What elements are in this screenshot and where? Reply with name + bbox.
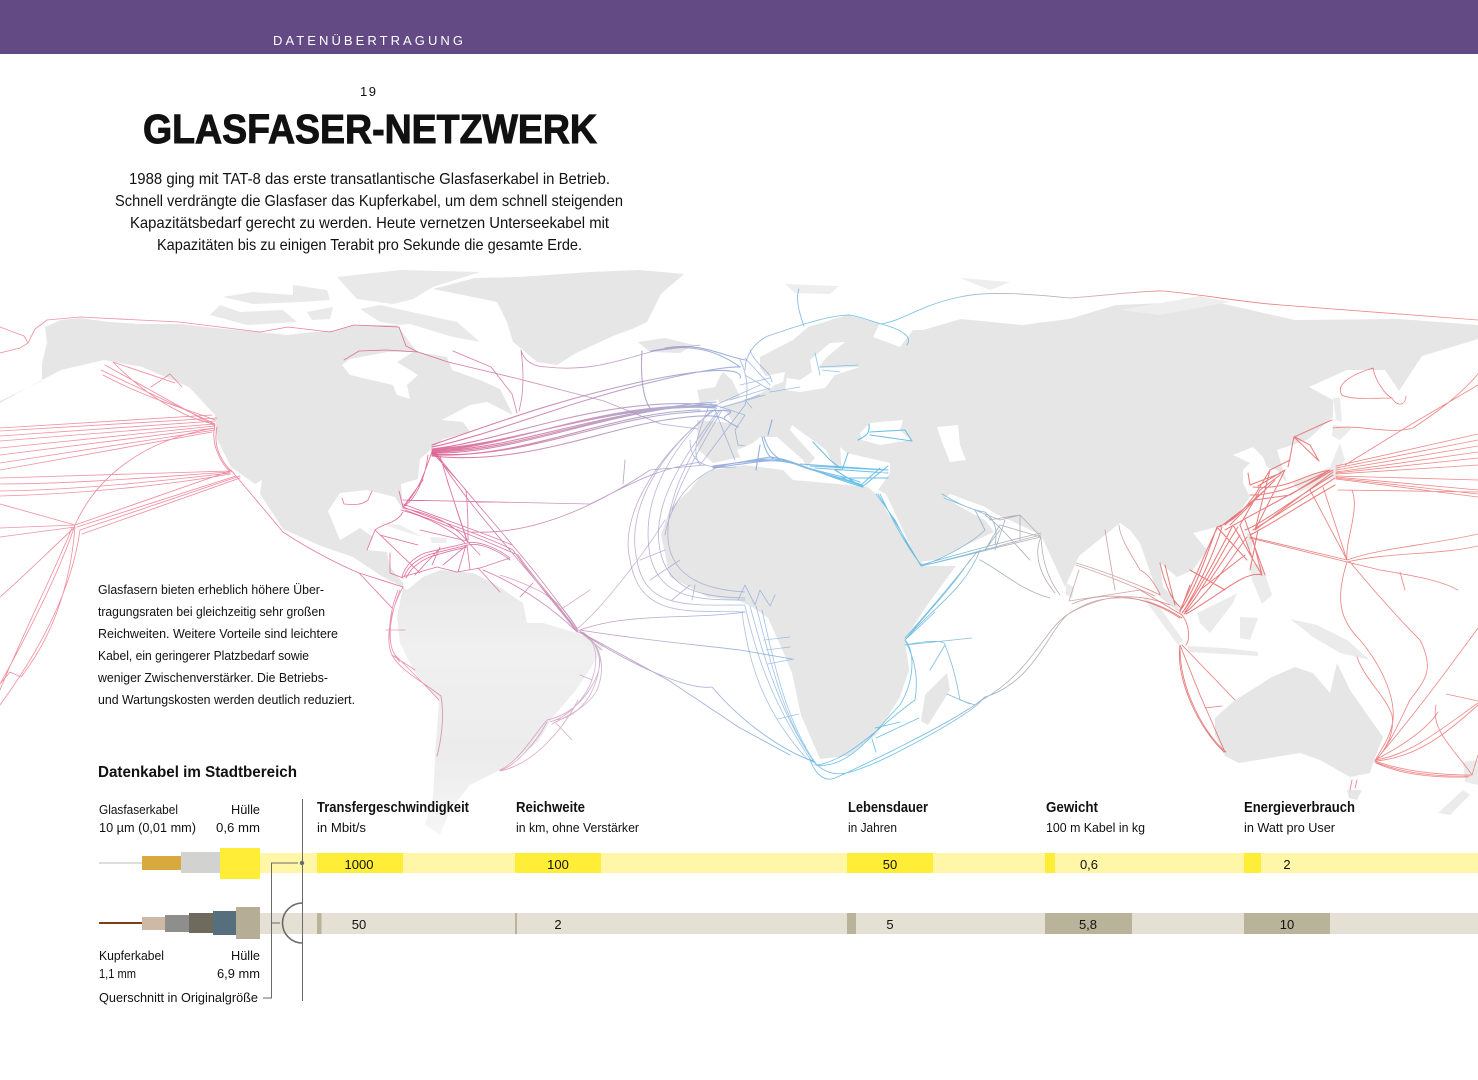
fibre cable labels: Hülle bbox=[231, 802, 260, 817]
fibre cable labels: Glasfaserkabel bbox=[99, 802, 178, 817]
column: Lebensdauer: 50 bbox=[883, 857, 897, 872]
cables: Mediterranean bbox=[713, 420, 912, 487]
column: Reichweite: in km, ohne Verstärker bbox=[516, 820, 640, 835]
land: South America bbox=[397, 570, 604, 835]
land: Arctic Canada islands bbox=[210, 270, 480, 342]
side note text: Glasfasern bieten erheblich höhere Über- bbox=[98, 582, 324, 597]
land: Baltic, Black Sea, Caspian (water) bbox=[755, 342, 966, 462]
cables: Arctic route bbox=[0, 289, 1478, 429]
column: Energieverbrauch: Energieverbrauch bbox=[1244, 799, 1355, 816]
fibre cable labels bbox=[99, 802, 260, 835]
intro paragraph: Kapazitäten bis zu einigen Terabit pro Sekunde die gesamte Erde. bbox=[157, 237, 582, 254]
column: Lebensdauer bbox=[847, 799, 933, 934]
copper cable labels: 6,9 mm bbox=[217, 966, 260, 981]
cables: Caribbean and Central America bbox=[342, 452, 705, 632]
header bar bbox=[0, 0, 1478, 54]
comparison heading: Datenkabel im Stadtbereich bbox=[98, 764, 297, 781]
column: Energieverbrauch: 10 bbox=[1280, 917, 1294, 932]
fibre cable labels: 0,6 mm bbox=[216, 820, 260, 835]
column: Transfergeschwindigkeit: Transfergeschwindigkeit bbox=[317, 799, 469, 816]
cables: East Asia bbox=[1160, 420, 1335, 614]
copper cable cross-section bbox=[99, 907, 260, 939]
column: Reichweite bbox=[515, 799, 640, 934]
cables: Guam, Australia and New Zealand bbox=[1179, 487, 1478, 790]
copper cable labels bbox=[99, 948, 260, 981]
section label: DATENÜBERTRAGUNG bbox=[273, 33, 463, 48]
side note text: tragungsraten bei gleichzeitig sehr großen bbox=[98, 604, 325, 619]
column: Energieverbrauch bbox=[1244, 799, 1355, 934]
column: Lebensdauer: 5 bbox=[886, 917, 894, 932]
intro paragraph: Schnell verdrängte die Glasfaser das Kupferkabel, um dem schnell steigenden bbox=[115, 193, 623, 210]
cables: North Atlantic bbox=[432, 346, 745, 458]
column: Reichweite: 2 bbox=[554, 917, 562, 932]
world map landmasses bbox=[0, 270, 1478, 835]
copper cable labels: Kupferkabel bbox=[99, 948, 164, 963]
column: Transfergeschwindigkeit: 50 bbox=[352, 917, 366, 932]
land: North America bbox=[0, 318, 513, 587]
copper cable labels: Hülle bbox=[231, 948, 260, 963]
land: Iceland bbox=[638, 338, 694, 353]
cables: South Atlantic to Africa bbox=[580, 612, 815, 762]
column: Lebensdauer: in Jahren bbox=[848, 820, 897, 835]
cables: Cape to East Africa and Indian Ocean bbox=[810, 550, 1182, 779]
cables: Pacific to North America bbox=[0, 362, 403, 705]
column: Gewicht bbox=[1045, 799, 1145, 934]
side note text: weniger Zwischenverstärker. Die Betriebs- bbox=[97, 670, 328, 685]
intro paragraph bbox=[115, 171, 623, 254]
land: Hudson Bay (water) bbox=[342, 352, 418, 399]
side note text: und Wartungskosten werden deutlich reduziert. bbox=[98, 692, 355, 707]
column: Transfergeschwindigkeit: in Mbit/s bbox=[317, 820, 367, 835]
land: Australia bbox=[1215, 663, 1383, 800]
cables: South America bbox=[386, 520, 665, 771]
land: Madagascar bbox=[921, 673, 950, 725]
cables: Europe around West Africa bbox=[628, 350, 858, 612]
fibre cable labels: 10 µm (0,01 mm) bbox=[99, 820, 196, 835]
column: Reichweite: Reichweite bbox=[516, 799, 585, 816]
title: GLASFASER-NETZWERK bbox=[143, 106, 597, 152]
cables: West and South Africa bbox=[738, 585, 816, 764]
cables: West Pacific and Russia bbox=[1333, 368, 1478, 497]
column: Energieverbrauch: in Watt pro User bbox=[1244, 820, 1336, 835]
land: UK and Ireland bbox=[697, 372, 740, 403]
copper band bbox=[260, 913, 1478, 934]
cables: Bay of Bengal bbox=[1069, 525, 1182, 618]
page number: 19 bbox=[360, 84, 376, 99]
column: Gewicht: 0,6 bbox=[1080, 857, 1098, 872]
column: Transfergeschwindigkeit: 1000 bbox=[345, 857, 373, 872]
column: Energieverbrauch: 2 bbox=[1283, 857, 1291, 872]
land: Asian islands bbox=[1066, 398, 1478, 815]
land: Africa bbox=[661, 465, 956, 759]
cross-section note: Querschnitt in Originalgröße bbox=[99, 990, 258, 1005]
side note text: Kabel, ein geringerer Platzbedarf sowie bbox=[98, 648, 309, 663]
copper cable labels: 1,1 mm bbox=[99, 966, 136, 981]
side note text bbox=[97, 582, 355, 707]
column: Reichweite: 100 bbox=[547, 857, 569, 872]
land: Caribbean and northern islands bbox=[380, 278, 1230, 543]
column: Transfergeschwindigkeit bbox=[317, 799, 469, 934]
land: Eurasia bbox=[697, 301, 1478, 617]
land: Greenland bbox=[433, 270, 684, 365]
column: Lebensdauer: Lebensdauer bbox=[848, 799, 928, 816]
cross-section bracket and semicircle bbox=[263, 799, 304, 1001]
fibre cable cross-section bbox=[99, 848, 260, 879]
intro paragraph: Kapazitätsbedarf gerecht zu werden. Heute vernetzen Unterseekabel mit bbox=[130, 215, 610, 232]
fibre band bbox=[260, 853, 1478, 873]
intro paragraph: 1988 ging mit TAT-8 das erste transatlantische Glasfaserkabel in Betrieb. bbox=[129, 171, 610, 188]
cables: Red Sea, Gulf and Arabian Sea bbox=[876, 494, 1060, 598]
column: Gewicht: Gewicht bbox=[1046, 799, 1098, 816]
column: Gewicht: 100 m Kabel in kg bbox=[1046, 820, 1145, 835]
side note text: Reichweiten. Weitere Vorteile sind leichtere bbox=[98, 626, 338, 641]
column: Gewicht: 5,8 bbox=[1079, 917, 1097, 932]
